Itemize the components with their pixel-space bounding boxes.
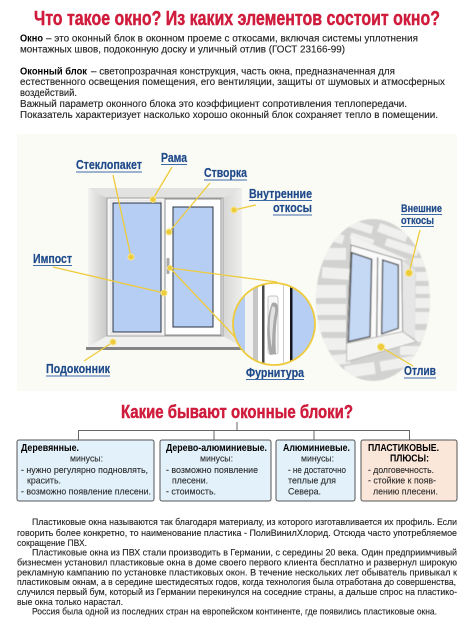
callout: Внутренние откосы <box>231 187 312 215</box>
text block: history of plastic windows: рекламную кампанию по установке пластиковых окон. В течение нескольких лет обыватель привыкал к <box>17 568 458 578</box>
callout: Рама: Рама <box>161 151 188 165</box>
panel: plastic <box>361 440 457 501</box>
panel: wood-aluminium: - стоимость. <box>166 486 216 498</box>
callout: Подоконник <box>46 339 116 376</box>
panel: wood-aluminium: плесени. <box>172 476 208 486</box>
panel: wood-aluminium: Дерево-алюминиевые. <box>166 443 267 454</box>
panel: wooden <box>17 440 154 501</box>
callout: Подоконник: Подоконник <box>46 362 111 376</box>
panel: aluminium: - не достаточно <box>288 465 346 476</box>
callout: Импост: Импост <box>33 252 72 266</box>
panel: wooden: - возможно появление плесени. <box>21 486 151 498</box>
panel: plastic: - долговечность. <box>368 465 434 476</box>
text block: history of plastic windows: бизнесмен установил пластиковые окна в доме своего первого клиента бесплатно и развернул широкую <box>17 558 457 568</box>
text block: definitions <box>20 32 445 121</box>
illustration: exterior window in brick wall <box>316 218 430 381</box>
text block: definitions: – светопрозрачная конструкция, часть окна, предназначенная для <box>91 66 395 78</box>
panel: aluminium: минусы: <box>301 454 334 464</box>
callout: Рама <box>150 151 188 202</box>
panel: aluminium: Севера. <box>288 486 321 498</box>
panel: wooden: красить. <box>27 476 61 486</box>
text block: definitions: Окно <box>20 34 43 44</box>
text block: definitions: – это оконный блок в оконном проеме с откосами, включая системы уплотнения <box>46 32 418 44</box>
callout: Отлив: Отлив <box>404 364 436 378</box>
panel: wooden: минусы: <box>70 454 103 464</box>
text block: definitions: монтажных швов, подоконную доску и уличный отлив (ГОСТ 23166-99) <box>20 44 345 56</box>
callout: Внешние откосы: Внешние <box>401 203 442 215</box>
panel: wooden: - нужно регулярно подновлять, <box>21 465 148 476</box>
callout: Внутренние откосы: Внутренние <box>249 187 312 201</box>
illustration: interior window <box>86 188 243 350</box>
callout: Створка <box>166 166 248 235</box>
text block: definitions: Оконный блок <box>20 66 88 78</box>
callout: Створка: Створка <box>204 166 248 180</box>
connector tree <box>78 422 410 440</box>
panel: plastic: ПЛЮСЫ: <box>390 454 429 464</box>
text block: history of plastic windows: Россия была одной из последних стран на европейском континенте, где появились пластиковые окна. <box>32 606 437 618</box>
panel: wooden: Деревянные. <box>21 443 79 454</box>
text block: history of plastic windows: говорить более конкретно, то наименование пластика - ПолиВинилХлорид. Отсюда часто употребляемое <box>17 528 457 539</box>
text block: history of plastic windows: вые окна только нарастал. <box>17 597 123 608</box>
text block: history of plastic windows: сокращение ПВХ. <box>17 538 87 549</box>
callout: Отлив <box>378 344 436 378</box>
text block: definitions: Показатель характеризует насколько хорошо оконный блок сохраняет тепло в помещении. <box>20 109 438 121</box>
text block: definitions: естественного освещения помещения, его вентиляции, защиты от шумовых и атмосферных <box>20 76 445 88</box>
callout: Внешние откосы <box>401 203 442 276</box>
text block: history of plastic windows <box>17 517 458 618</box>
panel: plastic: - стойкие к появ- <box>368 476 436 486</box>
panel: wood-aluminium: минусы: <box>200 454 233 464</box>
callout: Внешние откосы: откосы <box>401 215 434 227</box>
callout: Фурнитура: Фурнитура <box>246 366 305 380</box>
text block: definitions: воздействий. <box>20 88 77 99</box>
text block: definitions: Важный параметр оконного блока это коэффициент сопротивления теплопередачи. <box>20 98 407 110</box>
callout: Стеклопакет <box>76 158 142 260</box>
panel: wood-aluminium: - возможно появление <box>166 465 258 476</box>
panel: aluminium: Алюминиевые. <box>283 443 350 454</box>
panel: aluminium <box>276 440 355 501</box>
callout: Стеклопакет: Стеклопакет <box>76 158 142 172</box>
callout: Импост <box>33 252 167 296</box>
illustration: hardware loupe <box>232 282 316 368</box>
panel: aluminium: теплые для <box>288 476 336 486</box>
heading: window block types: Какие бывают оконные блоки? <box>121 402 353 422</box>
panel: wood-aluminium <box>160 440 271 501</box>
callout: Фурнитура <box>168 266 305 380</box>
panel: plastic: ПЛАСТИКОВЫЕ. <box>368 443 439 454</box>
panel: plastic: лению плесени. <box>373 486 438 498</box>
callout: Внутренние откосы: откосы <box>273 201 312 215</box>
text block: history of plastic windows: Пластиковые окна из ПВХ стали производить в Германии, с середины 20 века. Один предприимчивый <box>32 548 457 558</box>
panel: window diagram <box>17 134 457 391</box>
